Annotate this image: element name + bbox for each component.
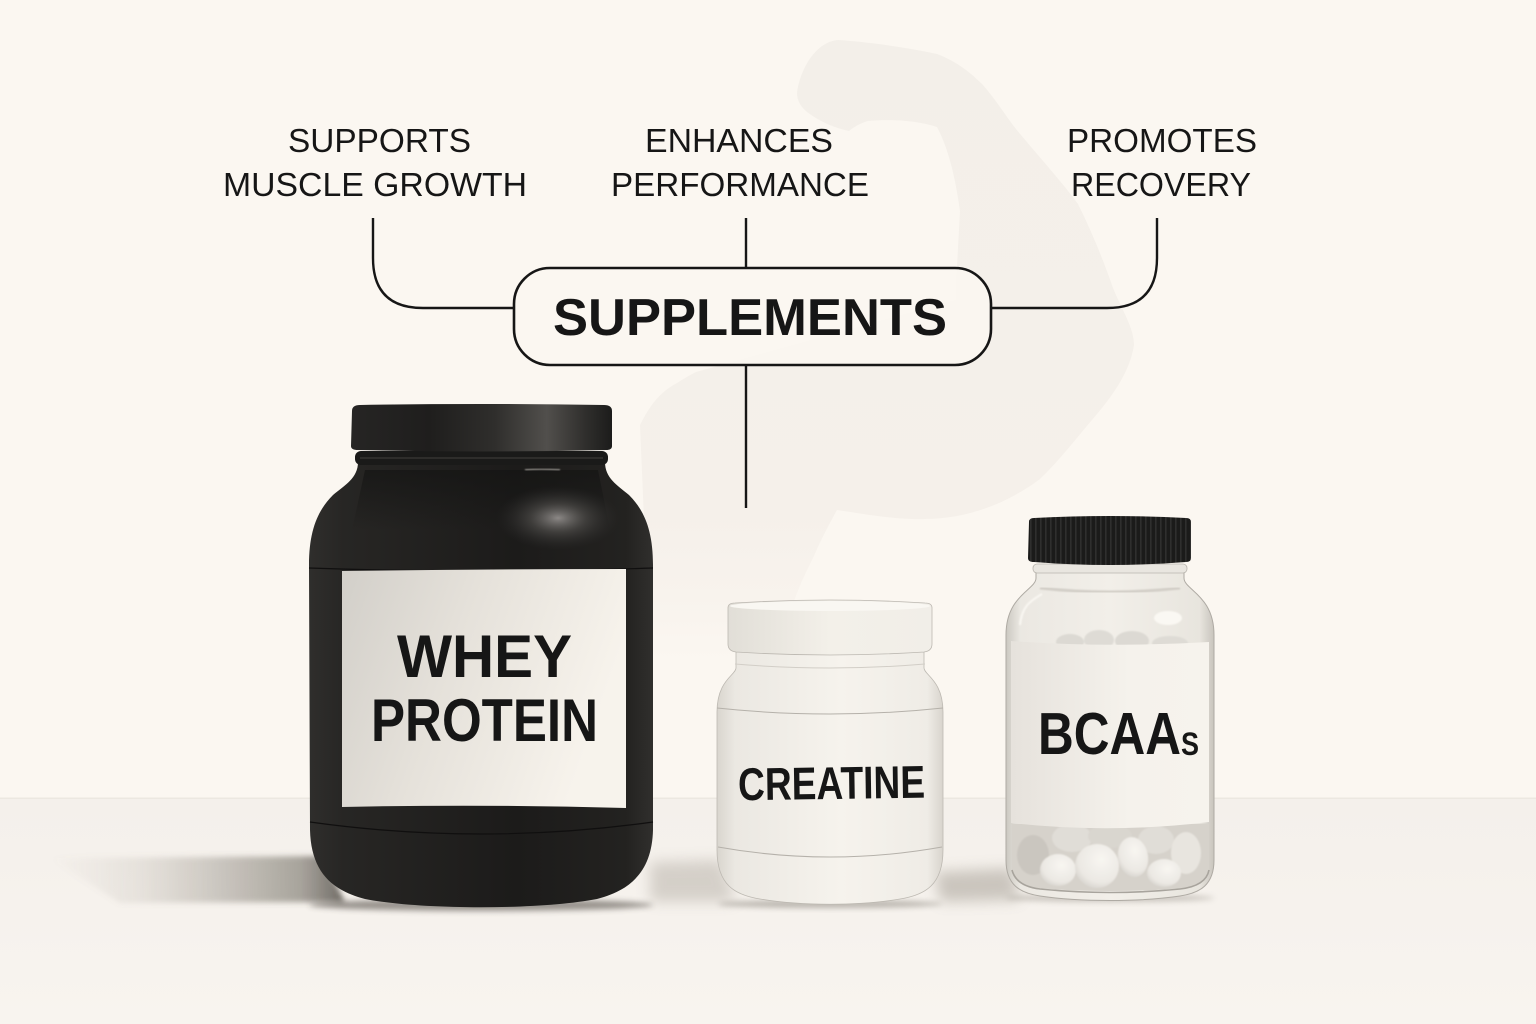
- product: creatine jar: [717, 600, 943, 904]
- background wall: [0, 0, 1536, 798]
- whey label text: WHEY: [397, 623, 572, 690]
- benefit label: supports muscle growth: [223, 122, 527, 203]
- flexed arm silhouette watermark: [640, 40, 1134, 660]
- bottle glass highlights: [1020, 588, 1182, 625]
- whey label: [342, 569, 626, 808]
- capsules bottom: [1017, 824, 1201, 888]
- connector: promotes recovery to hub: [991, 218, 1157, 308]
- benefit label: promotes recovery: RECOVERY: [1071, 166, 1251, 203]
- whey jar seams: [309, 568, 653, 834]
- benefit label: enhances performance: [611, 122, 869, 203]
- benefit label: supports muscle growth: MUSCLE GROWTH: [223, 166, 527, 203]
- creatine jar seams: [717, 664, 943, 857]
- bottle label: [1011, 641, 1209, 828]
- product: whey protein jar: [309, 404, 653, 907]
- benefit label: enhances performance: PERFORMANCE: [611, 166, 869, 203]
- bottle label text: S: [1181, 726, 1199, 762]
- whey label text: [371, 623, 598, 754]
- benefit label: promotes recovery: [1067, 122, 1257, 203]
- connector: hub to products: [745, 365, 747, 508]
- capsules top: [1056, 630, 1188, 651]
- bottle label text: BCAA: [1038, 701, 1181, 767]
- bottle lid: [1028, 516, 1191, 565]
- benefit label: supports muscle growth: SUPPORTS: [288, 122, 471, 159]
- whey label text: PROTEIN: [371, 687, 598, 754]
- benefit label: enhances performance: ENHANCES: [645, 122, 833, 159]
- whey jar body: [309, 462, 653, 907]
- whey jar neck: [355, 451, 608, 470]
- product: BCAAs bottle: [1006, 516, 1214, 900]
- whey jar lid: [351, 404, 612, 452]
- whey jar gloss highlight: [496, 486, 620, 550]
- hub: supplements: [514, 268, 991, 365]
- bottle base: [1012, 870, 1209, 892]
- connector: supports muscle growth to hub: [373, 218, 514, 308]
- floor surface: [0, 798, 1536, 1024]
- floor shadows: [50, 856, 1214, 911]
- capsule chamber tint: [1012, 824, 1209, 891]
- benefit label: promotes recovery: PROMOTES: [1067, 122, 1257, 159]
- creatine jar body: [717, 652, 943, 904]
- hub: supplements: SUPPLEMENTS: [553, 289, 947, 347]
- creatine label text: CREATINE: [738, 756, 925, 810]
- bottle glass body: [1006, 565, 1214, 900]
- whey jar shoulder shading: [352, 470, 610, 530]
- creatine jar lid: [728, 600, 932, 655]
- bottle neck ring: [1033, 564, 1187, 573]
- connector: enhances performance to hub: [745, 218, 747, 268]
